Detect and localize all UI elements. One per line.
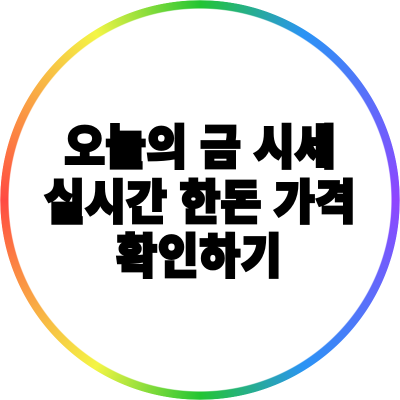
title line 2: 실시간 한돈 가격 [44,177,355,229]
title line 3: 확인하기 [116,231,282,283]
title line 1: 오늘의 금 시세 [64,122,335,174]
